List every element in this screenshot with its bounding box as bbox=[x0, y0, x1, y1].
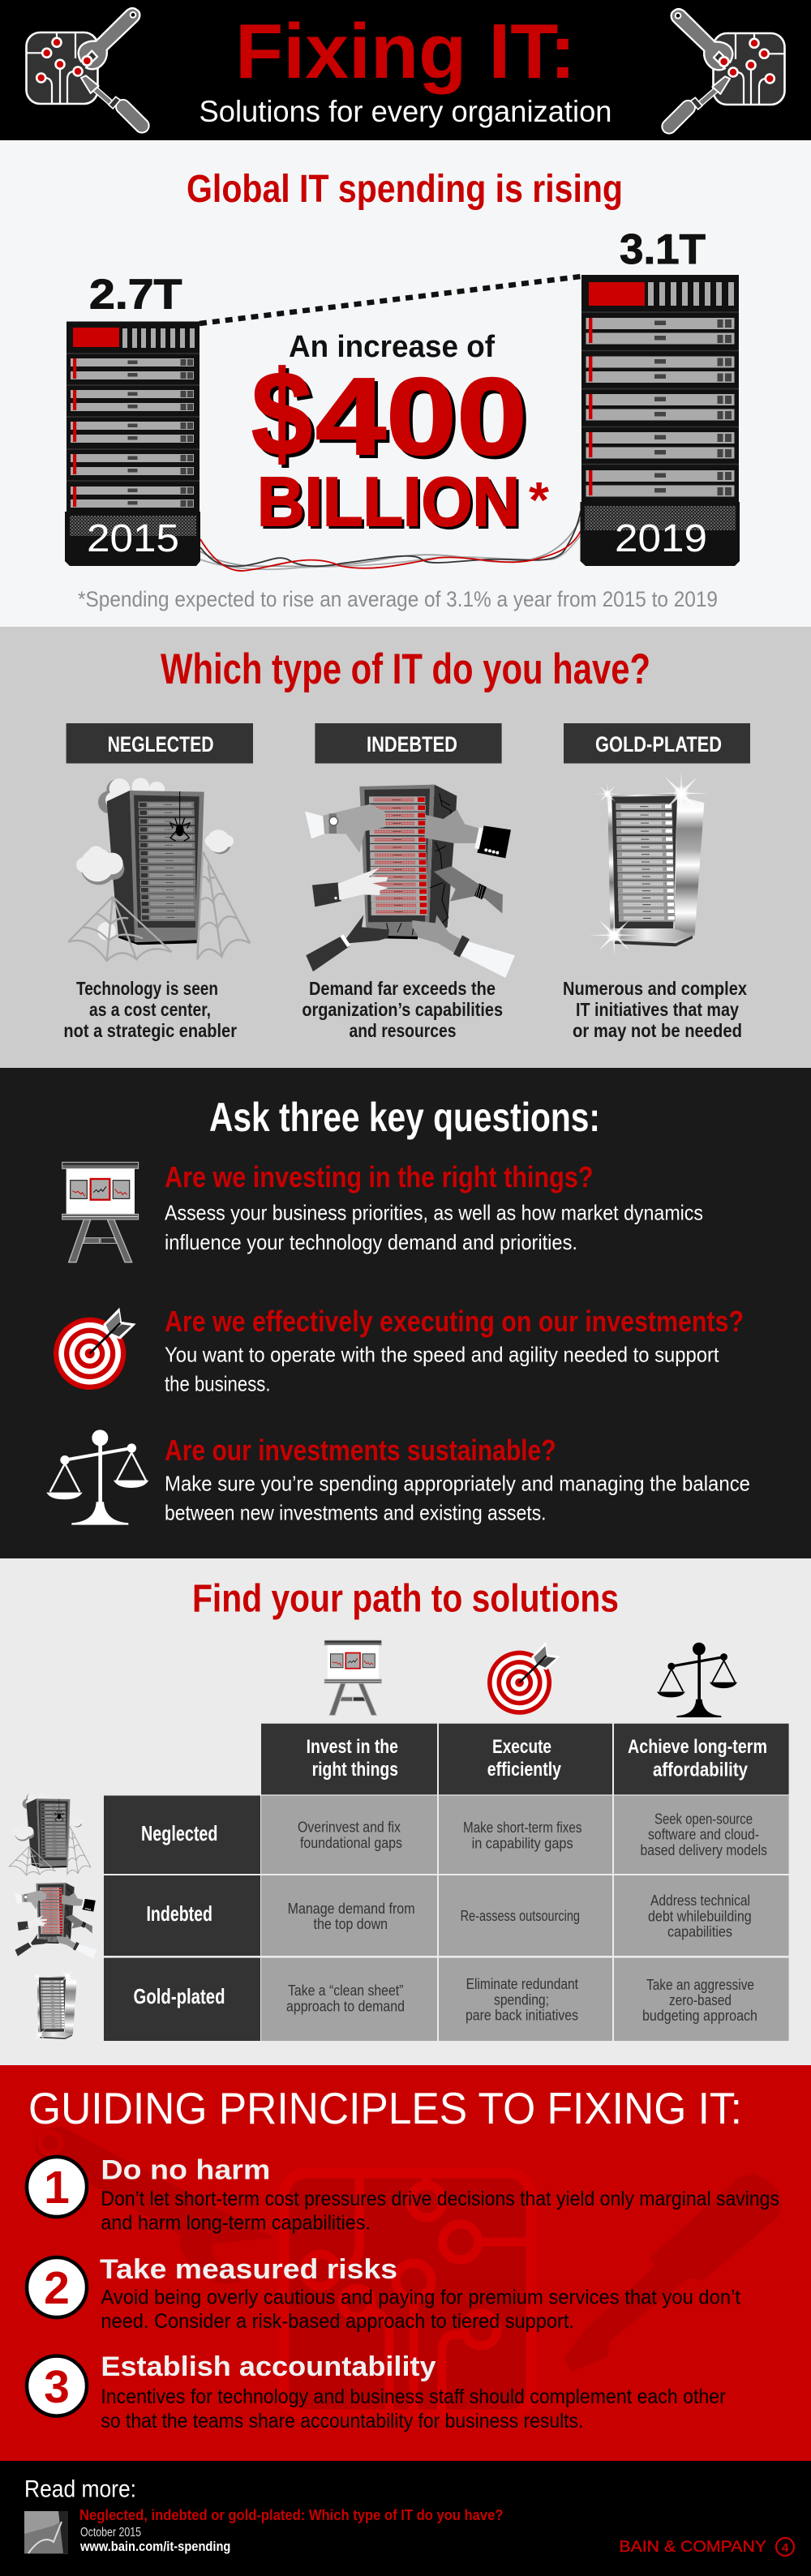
big number: $400: 400 bbox=[315, 355, 527, 478]
icon: target bbox=[487, 1642, 560, 1715]
table cells: Manage demand from bbox=[288, 1900, 415, 1917]
table cells: pare back initiatives bbox=[466, 2007, 578, 2024]
icon: presentation board bbox=[324, 1640, 381, 1716]
principle 1: Do no harm bbox=[101, 2155, 270, 2186]
table cells: zero-based bbox=[669, 1991, 732, 2008]
table row labels: Indebted bbox=[146, 1901, 212, 1926]
column: indebted: organization’s capabilities bbox=[302, 999, 503, 1020]
cables between racks bbox=[200, 511, 581, 571]
column: gold-plated: Numerous and complex bbox=[563, 978, 747, 999]
report date: October 2015 bbox=[80, 2526, 141, 2540]
table cells: Seek open-source bbox=[654, 1810, 753, 1828]
report thumbnail bbox=[24, 2511, 68, 2553]
question 3 bbox=[165, 1434, 750, 1525]
table cells: spending; bbox=[494, 1991, 549, 2008]
icon: circuit board with wrench and screwdriver, left bbox=[26, 8, 142, 126]
table cells: Address technical bbox=[650, 1892, 750, 1909]
column: neglected: NEGLECTED bbox=[108, 732, 214, 757]
server rack 2015 bbox=[65, 321, 200, 566]
icon: presentation board bbox=[62, 1162, 139, 1262]
table column headers bbox=[261, 1724, 789, 1794]
column: indebted: Demand far exceeds the bbox=[309, 978, 496, 999]
table column headers: Invest in the bbox=[307, 1736, 398, 1758]
table cells: the top down bbox=[313, 1915, 388, 1932]
question 3: between new investments and existing assets. bbox=[165, 1501, 547, 1525]
title: Fixing IT: bbox=[235, 8, 576, 95]
column: gold-plated: or may not be needed bbox=[573, 1020, 742, 1041]
table column headers: Achieve long-term bbox=[628, 1736, 767, 1758]
question 2: You want to operate with the speed and agility needed to support bbox=[165, 1343, 719, 1367]
question 2: the business. bbox=[165, 1372, 271, 1396]
column: gold-plated: GOLD-PLATED bbox=[595, 732, 722, 757]
heading: Global IT spending is rising bbox=[187, 168, 623, 211]
question 3: Make sure you’re spending appropriately and managing the balance bbox=[165, 1472, 750, 1496]
principle 1: and harm long-term capabilities. bbox=[101, 2212, 371, 2235]
table cells: Take a “clean sheet” bbox=[288, 1982, 403, 1999]
server rack 2019: 2019 bbox=[615, 517, 707, 560]
footnote: *Spending expected to rise an average of 3.1% a year from 2015 to 2019 bbox=[78, 587, 718, 611]
principle 3: so that the teams share accountability for business results. bbox=[101, 2410, 583, 2432]
heading: GUIDING PRINCIPLES TO FIXING IT: bbox=[28, 2083, 742, 2133]
watermark: circuit board with tools bbox=[35, 2127, 782, 2415]
question 2 bbox=[165, 1305, 744, 1396]
text: an increase of: An increase of bbox=[289, 330, 495, 364]
question 1: Are we investing in the right things? bbox=[165, 1160, 594, 1194]
table cells: approach to demand bbox=[286, 1998, 405, 2014]
column: neglected: as a cost center, bbox=[89, 999, 211, 1020]
principle 2: 2 bbox=[44, 2262, 70, 2314]
question 1: influence your technology demand and priorities. bbox=[165, 1230, 577, 1254]
principle 2: Take measured risks bbox=[100, 2254, 397, 2285]
column: neglected: Technology is seen bbox=[76, 978, 218, 999]
icon: gold-plated server small bbox=[29, 1967, 79, 2043]
logo: Bain and Company: 4 bbox=[782, 2541, 789, 2555]
big number: $400 bbox=[251, 347, 527, 481]
principle 2: Avoid being overly cautious and paying for premium services that you don’t bbox=[101, 2286, 740, 2308]
big number: $400: $ bbox=[251, 347, 312, 481]
principle 3: Incentives for technology and business staff should complement each other bbox=[101, 2385, 726, 2408]
report title: Neglected, indebted or gold-plated: Which type of IT do you have? bbox=[79, 2507, 503, 2523]
report url: www.bain.com/it-spending bbox=[79, 2539, 230, 2554]
heading: Ask three key questions: bbox=[209, 1095, 600, 1140]
table cells: software and cloud- bbox=[648, 1826, 759, 1843]
subtitle: Solutions for every organization bbox=[200, 95, 611, 128]
principle 1 bbox=[27, 2155, 779, 2235]
column: indebted bbox=[302, 723, 515, 1041]
table cells: in capability gaps bbox=[472, 1835, 573, 1852]
icon: neglected server small bbox=[9, 1793, 91, 1875]
principle 1: 1 bbox=[44, 2162, 70, 2214]
panel: header bbox=[0, 0, 811, 140]
read more label: Read more: bbox=[24, 2476, 136, 2502]
column: gold-plated bbox=[563, 723, 750, 1041]
table column headers: right things bbox=[312, 1759, 398, 1781]
principle 2: need. Consider a risk-based approach to tiered support. bbox=[101, 2310, 574, 2333]
principle 3: 3 bbox=[44, 2361, 70, 2413]
icon: indebted server small bbox=[15, 1883, 97, 1959]
dotted growth line bbox=[200, 276, 581, 324]
column: neglected bbox=[63, 723, 253, 1041]
table column headers: Execute bbox=[492, 1736, 551, 1758]
logo: Bain and Company: BAIN & COMPANY bbox=[619, 2539, 766, 2556]
panel: three key questions bbox=[0, 1068, 811, 1558]
icon: target with arrow bbox=[54, 1308, 136, 1390]
table cells: foundational gaps bbox=[300, 1834, 402, 1851]
panel: guiding principles bbox=[0, 2065, 811, 2461]
label: 2.7T: 2.7T bbox=[89, 271, 182, 318]
column: indebted: INDEBTED bbox=[367, 732, 457, 757]
panel: footer bbox=[0, 2461, 811, 2576]
column: gold-plated: IT initiatives that may bbox=[576, 999, 739, 1020]
table row labels: Gold-plated bbox=[133, 1984, 225, 2008]
icon: balance scale bbox=[46, 1429, 148, 1525]
principle 3: Establish accountability bbox=[101, 2351, 436, 2382]
question 1: Assess your business priorities, as well as how market dynamics bbox=[165, 1200, 703, 1224]
big word: BILLION: BILLION bbox=[257, 464, 520, 541]
heading: Find your path to solutions bbox=[192, 1578, 619, 1620]
table cells: Eliminate redundant bbox=[466, 1975, 578, 1992]
icon: balance scale bbox=[657, 1643, 737, 1717]
column: neglected: not a strategic enabler bbox=[63, 1020, 237, 1041]
table cells: based delivery models bbox=[641, 1841, 767, 1858]
panel: global IT spending bbox=[0, 140, 811, 627]
panel: which type of IT bbox=[0, 627, 811, 1068]
question 3: Are our investments sustainable? bbox=[165, 1434, 556, 1467]
table cells bbox=[261, 1795, 789, 2041]
column: indebted: and resources bbox=[349, 1020, 456, 1041]
panel: find your path to solutions bbox=[0, 1558, 811, 2066]
table column headers: efficiently bbox=[487, 1759, 562, 1781]
principle 3 bbox=[27, 2351, 726, 2432]
label: 3.1T: 3.1T bbox=[620, 226, 706, 273]
table row labels bbox=[104, 1795, 260, 2041]
table cells: budgeting approach bbox=[642, 2007, 757, 2024]
heading: Which type of IT do you have? bbox=[161, 645, 650, 693]
server rack 2019 bbox=[581, 275, 740, 566]
server rack 2015: 2015 bbox=[87, 517, 179, 560]
table row labels: Neglected bbox=[141, 1821, 217, 1845]
table cells: Take an aggressive bbox=[646, 1976, 754, 1993]
principle 2 bbox=[27, 2254, 740, 2333]
table column headers: affordability bbox=[653, 1759, 749, 1781]
table cells: Overinvest and fix bbox=[298, 1818, 401, 1836]
icon: circuit board with wrench and screwdriver, right bbox=[669, 9, 785, 126]
table cells: Make short-term fixes bbox=[463, 1819, 582, 1836]
asterisk: * bbox=[529, 473, 550, 529]
table cells: debt whilebuilding bbox=[648, 1908, 752, 1925]
table cells: Re-assess outsourcing bbox=[461, 1907, 580, 1924]
question 1 bbox=[165, 1160, 703, 1254]
table cells: capabilities bbox=[667, 1923, 732, 1940]
